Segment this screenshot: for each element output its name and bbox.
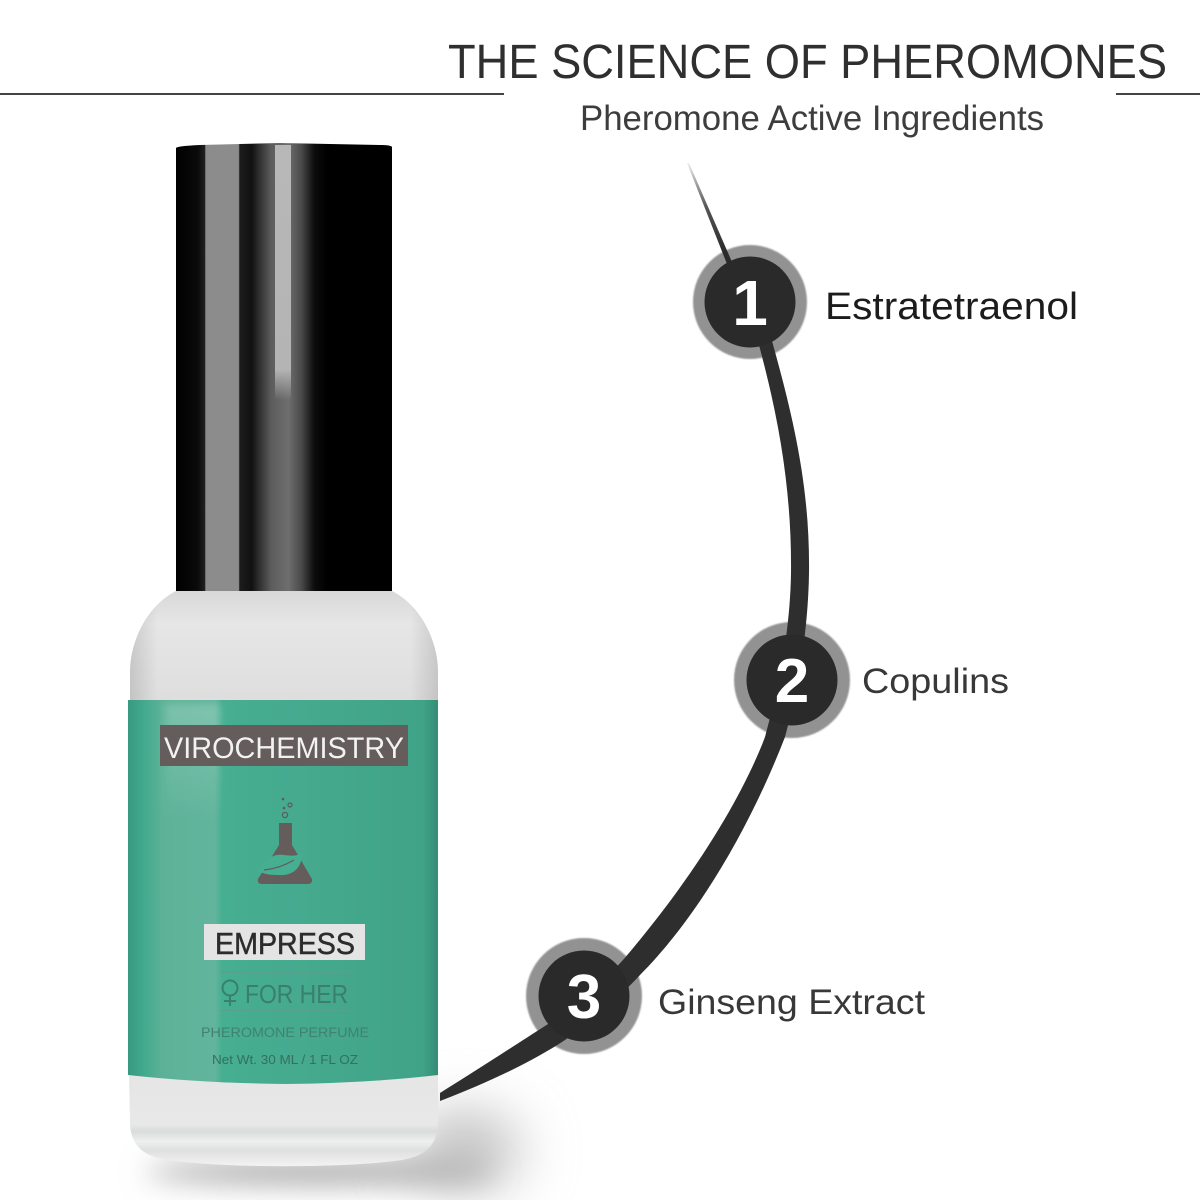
perfume bottle xyxy=(128,143,438,1166)
header rule right xyxy=(1116,93,1200,95)
bottle base xyxy=(129,1072,438,1166)
step 2 label: Copulins xyxy=(862,662,1009,701)
bottle shadow xyxy=(145,1112,520,1188)
step 2 marker xyxy=(746,634,838,726)
marker halo rings xyxy=(526,245,850,1054)
curve tail xyxy=(687,163,732,264)
cap glint xyxy=(275,145,291,401)
step 3 label: Ginseng Extract xyxy=(658,983,925,1022)
for her line: FOR HER xyxy=(245,979,348,1009)
header rule left xyxy=(0,93,504,95)
product type: PHEROMONE PERFUME xyxy=(201,1025,369,1040)
icon: flask with leaf xyxy=(257,798,312,884)
step 3 marker xyxy=(538,950,630,1042)
product name plate: EMPRESS xyxy=(215,926,355,961)
bottle shoulder xyxy=(130,591,438,701)
icon: female symbol xyxy=(222,980,238,1006)
for her line xyxy=(220,972,350,1011)
subtitle: Pheromone Active Ingredients xyxy=(580,99,1044,138)
green label xyxy=(128,700,438,1084)
step 1 label: Estratetraenol xyxy=(825,286,1078,328)
title: THE SCIENCE OF PHEROMONES xyxy=(448,36,1167,89)
step 1 marker: 1 xyxy=(732,267,768,339)
step 3 marker: 3 xyxy=(567,963,601,1032)
bottle cap xyxy=(176,143,392,591)
timeline curve xyxy=(440,163,809,1101)
curve body xyxy=(440,320,809,1101)
brand plate: VIROCHEMISTRY xyxy=(164,732,404,765)
net weight: Net Wt. 30 ML / 1 FL OZ xyxy=(212,1053,358,1067)
step 1 marker xyxy=(704,256,796,348)
step 2 marker: 2 xyxy=(775,647,809,716)
